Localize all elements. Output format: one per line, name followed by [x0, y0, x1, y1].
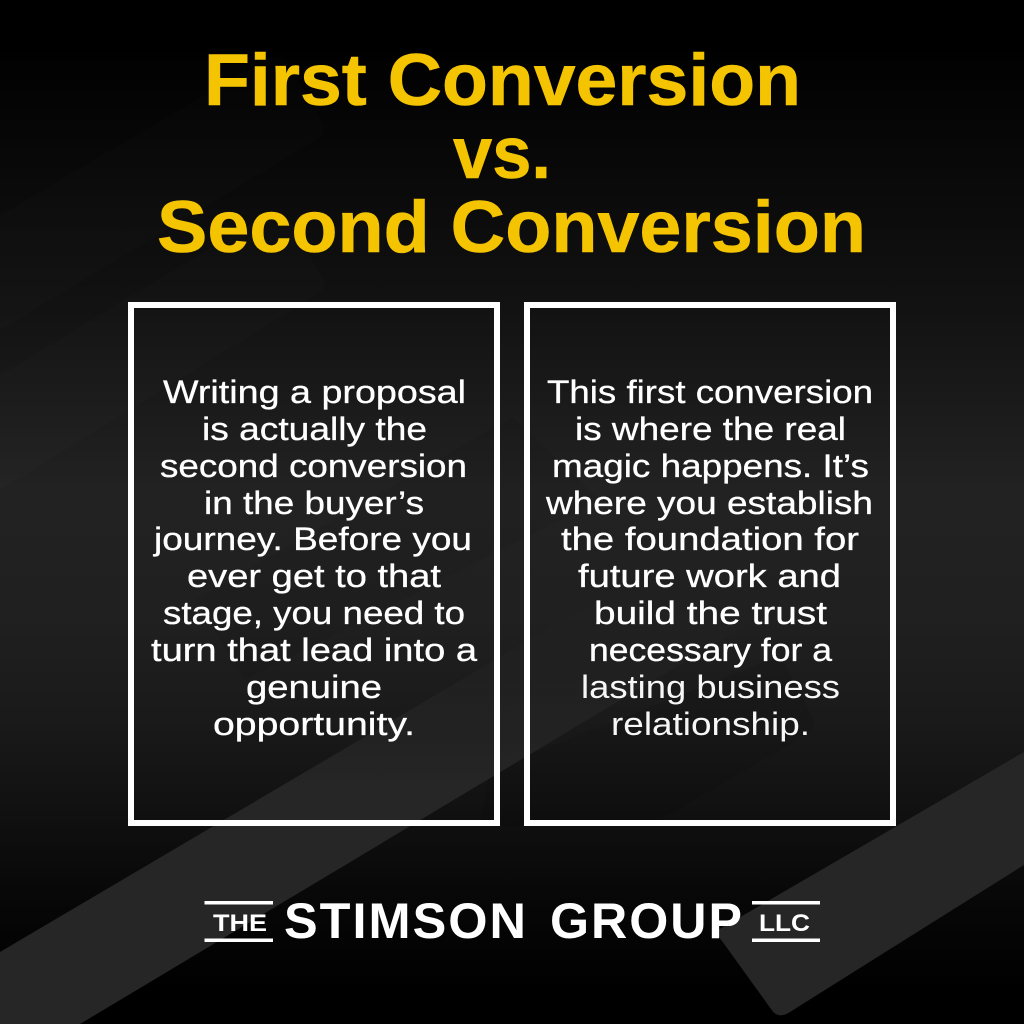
title: First Conversion — [204, 40, 801, 121]
panel: second box — [527, 305, 893, 823]
text: second box copy: relationship. — [611, 706, 810, 742]
text: second box copy: future work and — [578, 558, 841, 594]
text: second box copy: lasting business — [581, 669, 840, 705]
text: second box copy: magic happens. It’s — [552, 448, 869, 484]
text: second box copy — [545, 374, 873, 742]
text: first box copy: ever get to that — [187, 558, 441, 594]
text: first box copy: genuine — [246, 669, 382, 705]
text: second box copy: necessary for a — [589, 632, 833, 668]
text: second box copy: build the trust — [594, 595, 827, 631]
text: second box copy: where you establish — [545, 485, 873, 521]
text: first box copy: Writing a proposal — [163, 374, 466, 410]
logo: The Stimson Group LLC — [204, 893, 820, 949]
text: second box copy: This first conversion — [547, 374, 873, 410]
title: Second Conversion — [157, 187, 866, 268]
text: first box copy: stage, you need to — [163, 595, 465, 631]
text: first box copy: second conversion — [160, 448, 467, 484]
text: second box copy: the foundation for — [561, 521, 859, 557]
logo: The Stimson Group LLC: GROUP — [550, 893, 744, 949]
text: first box copy: in the buyer’s — [204, 485, 424, 521]
text: first box copy: opportunity. — [213, 706, 415, 742]
logo: The Stimson Group LLC: STIMSON — [284, 893, 528, 949]
text: first box copy: turn that lead into a — [151, 632, 478, 668]
logo: The Stimson Group LLC: THE — [213, 910, 267, 937]
text: first box copy: journey. Before you — [153, 521, 472, 557]
panel: first box — [131, 305, 497, 823]
title: vs. — [453, 113, 551, 194]
text: first box copy: is actually the — [202, 411, 427, 447]
title — [157, 40, 866, 268]
text: first box copy — [151, 374, 478, 742]
logo: The Stimson Group LLC: LLC — [759, 910, 810, 937]
text: second box copy: is where the real — [575, 411, 846, 447]
